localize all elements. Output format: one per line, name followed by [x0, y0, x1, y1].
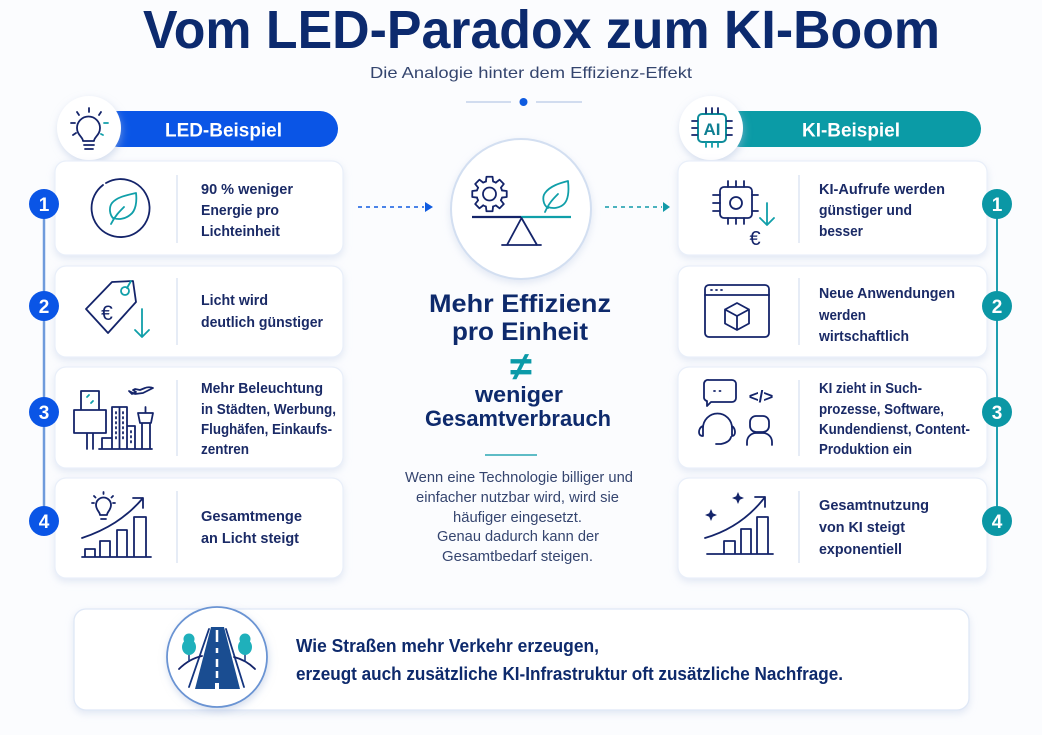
text: Licht wird — [201, 293, 268, 309]
text: deutlich günstiger — [201, 315, 323, 331]
trees — [182, 634, 252, 655]
number badges: LED: 3 — [39, 403, 49, 424]
callout text — [296, 636, 843, 684]
central heading: Gesamtverbrauch — [425, 406, 611, 431]
header: KI-Beispiel: KI-Beispiel — [802, 120, 900, 142]
text: Neue Anwendungen — [819, 286, 955, 302]
central explanation text: Wenn eine Technologie billiger und — [405, 470, 633, 486]
central circle: balance icon — [451, 139, 591, 279]
text: Flughäfen, Einkaufs- — [201, 422, 332, 438]
text: günstiger und — [819, 203, 912, 219]
icon: chip with price arrow — [713, 181, 774, 250]
text: in Städten, Werbung, — [201, 402, 336, 418]
text — [819, 182, 945, 240]
not equal sign: ≠ — [510, 345, 532, 389]
number badges: LED: 4 — [39, 512, 50, 533]
icon: chat, code, support, user: </> — [749, 387, 773, 406]
panel: LED card 4 — [55, 478, 343, 578]
central explanation text — [405, 470, 633, 565]
text: Kundendienst, Content- — [819, 422, 970, 438]
text — [819, 498, 929, 558]
icon: light bulb — [71, 108, 108, 149]
central heading — [425, 290, 611, 431]
icon: AI chip — [692, 108, 732, 147]
number badges: KI: 2 — [992, 297, 1002, 318]
text: prozesse, Software, — [819, 402, 944, 418]
text: zentren — [201, 442, 249, 458]
text: exponentiell — [819, 542, 902, 558]
text: von KI steigt — [819, 520, 905, 536]
text: Mehr Beleuchtung — [201, 381, 323, 397]
icon: leaf — [543, 181, 569, 212]
central heading: pro Einheit — [452, 318, 589, 346]
text: KI-Aufrufe werden — [819, 182, 945, 198]
panel: KI card 4 — [678, 478, 987, 578]
icon: AI chip: AI — [704, 120, 720, 139]
seesaw — [472, 217, 571, 245]
icon: chart with bulb — [82, 492, 151, 557]
text: wirtschaftlich — [818, 329, 909, 345]
text: Produktion ein — [819, 442, 912, 458]
icon: chip with price arrow: € — [749, 228, 761, 250]
number badges: KI: 4 — [992, 512, 1003, 533]
arrow: LED to centre — [358, 202, 433, 212]
central heading: weniger — [474, 382, 563, 407]
icon: leaf in circle — [92, 179, 150, 237]
timeline line: KI — [996, 204, 998, 521]
timeline line: LED — [43, 204, 45, 521]
panel: KI card 1 — [678, 161, 987, 255]
central explanation text: einfacher nutzbar wird, wird sie — [416, 490, 619, 506]
arrow: centre to KI — [605, 202, 670, 212]
central explanation text: Gesamtbedarf steigen. — [442, 549, 593, 565]
text: werden — [818, 308, 866, 324]
header: LED-Beispiel — [57, 96, 338, 160]
icon: gear — [472, 177, 507, 211]
icon: price tag with arrow — [86, 281, 149, 337]
text: an Licht steigt — [201, 531, 299, 547]
text: KI zieht in Such- — [819, 381, 922, 397]
text — [201, 182, 293, 240]
text: Lichteinheit — [201, 224, 280, 240]
header: KI-Beispiel — [679, 96, 981, 160]
icon: price tag with arrow: € — [101, 302, 113, 325]
header: LED-Beispiel: LED-Beispiel — [165, 120, 282, 142]
panel: LED card 2 — [55, 266, 343, 357]
number badges: KI: 3 — [992, 403, 1002, 424]
text — [818, 286, 955, 345]
callout text: erzeugt auch zusätzliche KI-Infrastruktur oft zusätzliche Nachfrage. — [296, 664, 843, 684]
callout text: Wie Straßen mehr Verkehr erzeugen, — [296, 636, 599, 656]
text: Energie pro — [201, 203, 279, 219]
text: Gesamtnutzung — [819, 498, 929, 514]
text: besser — [819, 224, 863, 240]
number badges: LED: 1 — [39, 195, 50, 216]
number badges: KI: 1 — [992, 195, 1003, 216]
central explanation text: häufiger eingesetzt. — [453, 510, 582, 526]
number badges: LED: 2 — [39, 297, 49, 318]
title: Vom LED-Paradox zum KI-Boom — [143, 0, 940, 60]
icon: app window with cube — [705, 285, 769, 337]
panel: LED card 3 — [55, 367, 343, 468]
panel: road analogy — [74, 607, 969, 710]
panel: LED card 1 — [55, 161, 343, 255]
text — [201, 293, 323, 331]
icon: chart with sparkles — [705, 492, 773, 554]
icon: road in circle — [167, 607, 267, 707]
subtitle: Die Analogie hinter dem Effizienz-Effekt — [370, 65, 693, 82]
text — [201, 381, 336, 458]
title ornament — [466, 98, 582, 106]
icon: chat, code, support, user — [699, 380, 773, 445]
central heading: Mehr Effizienz — [429, 290, 611, 318]
text: Gesamtmenge — [201, 509, 302, 525]
number badges: LED — [29, 189, 59, 536]
text — [201, 509, 302, 547]
panel: KI card 2 — [678, 266, 987, 357]
number badges: KI — [982, 189, 1012, 536]
text: 90 % weniger — [201, 182, 293, 198]
panel: KI card 3 — [678, 367, 987, 468]
road surface — [195, 627, 240, 689]
text — [819, 381, 970, 458]
icon: city, billboard, airport — [74, 387, 153, 449]
central explanation text: Genau dadurch kann der — [437, 529, 599, 545]
